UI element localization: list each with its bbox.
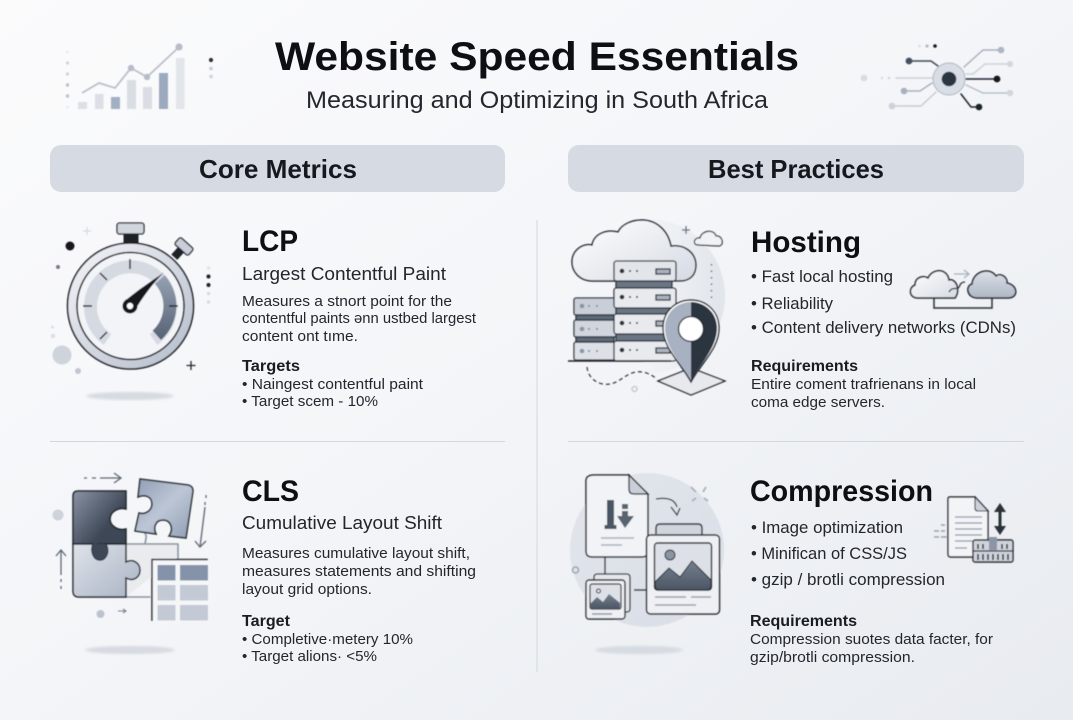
panel: LCP (51, 223, 477, 410)
description (242, 293, 477, 345)
requirements (751, 358, 976, 411)
icon: network hub (861, 44, 1013, 110)
requirements: Requirements (750, 613, 857, 630)
description: layout grid options. (242, 581, 372, 598)
requirements: Compression suotes data facter, for (750, 631, 993, 648)
panel: core metrics header (50, 145, 505, 192)
panel: best practices header: Best Practices (708, 154, 884, 184)
icon: cloud servers and location pin (568, 219, 725, 395)
requirements (750, 613, 993, 666)
compression bullet list (751, 518, 945, 589)
icon: growth chart (66, 43, 213, 109)
panel: core metrics header: Core Metrics (199, 154, 357, 184)
target: • Target alions· <5% (242, 648, 377, 665)
subtitle: Measuring and Optimizing in South Africa (306, 87, 769, 114)
icon: compressed file and images (570, 473, 724, 654)
compression bullet list: • Minifican of CSS/JS (751, 544, 907, 563)
hosting bullet list: • Fast local hosting (751, 267, 893, 286)
heading: Compression: Compression (750, 475, 933, 508)
targets: • Target scem - 10% (242, 393, 378, 410)
panel: compression (570, 473, 1013, 666)
subheading: Cumulative Layout Shift (242, 513, 442, 533)
targets: Targets (242, 358, 300, 375)
icon: stopwatch (51, 223, 211, 400)
hosting bullet list: • Content delivery networks (CDNs) (751, 318, 1016, 337)
panel: CLS (52, 473, 476, 665)
requirements: coma edge servers. (751, 394, 885, 411)
requirements: Entire coment trafrienans in local (751, 376, 976, 393)
compression bullet list: • gzip / brotli compression (751, 570, 945, 589)
target: • Completive·metery 10% (242, 631, 413, 648)
description: Measures cumulative layout shift, (242, 545, 470, 562)
description: content ont tıme. (242, 328, 358, 345)
description: measures statements and shifting (242, 563, 476, 580)
target (242, 613, 413, 665)
description (242, 545, 476, 598)
subheading: Largest Contentful Paint (242, 264, 446, 284)
targets (242, 358, 424, 410)
icon: connected clouds (910, 270, 1016, 308)
icon: puzzle and grid (52, 473, 209, 654)
target: Target (242, 613, 291, 630)
heading: LCP: LCP (242, 225, 298, 258)
targets: • Naingest contentful paint (242, 376, 424, 393)
hosting bullet list: • Reliability (751, 294, 833, 313)
requirements: Requirements (751, 358, 858, 375)
description: Measures a stnort point for the (242, 293, 452, 310)
panel: best practices header (568, 145, 1024, 192)
heading: CLS: CLS (242, 475, 299, 508)
title: Website Speed Essentials (275, 35, 799, 79)
compression bullet list: • Image optimization (751, 518, 903, 537)
panel: hosting (568, 219, 1016, 411)
requirements: gzip/brotli compression. (750, 649, 915, 666)
hosting bullet list (751, 267, 1016, 337)
description: contentful paints ənn ustbed largest (242, 310, 477, 327)
icon: document compression (934, 497, 1013, 562)
heading: Hosting: Hosting (751, 226, 861, 259)
